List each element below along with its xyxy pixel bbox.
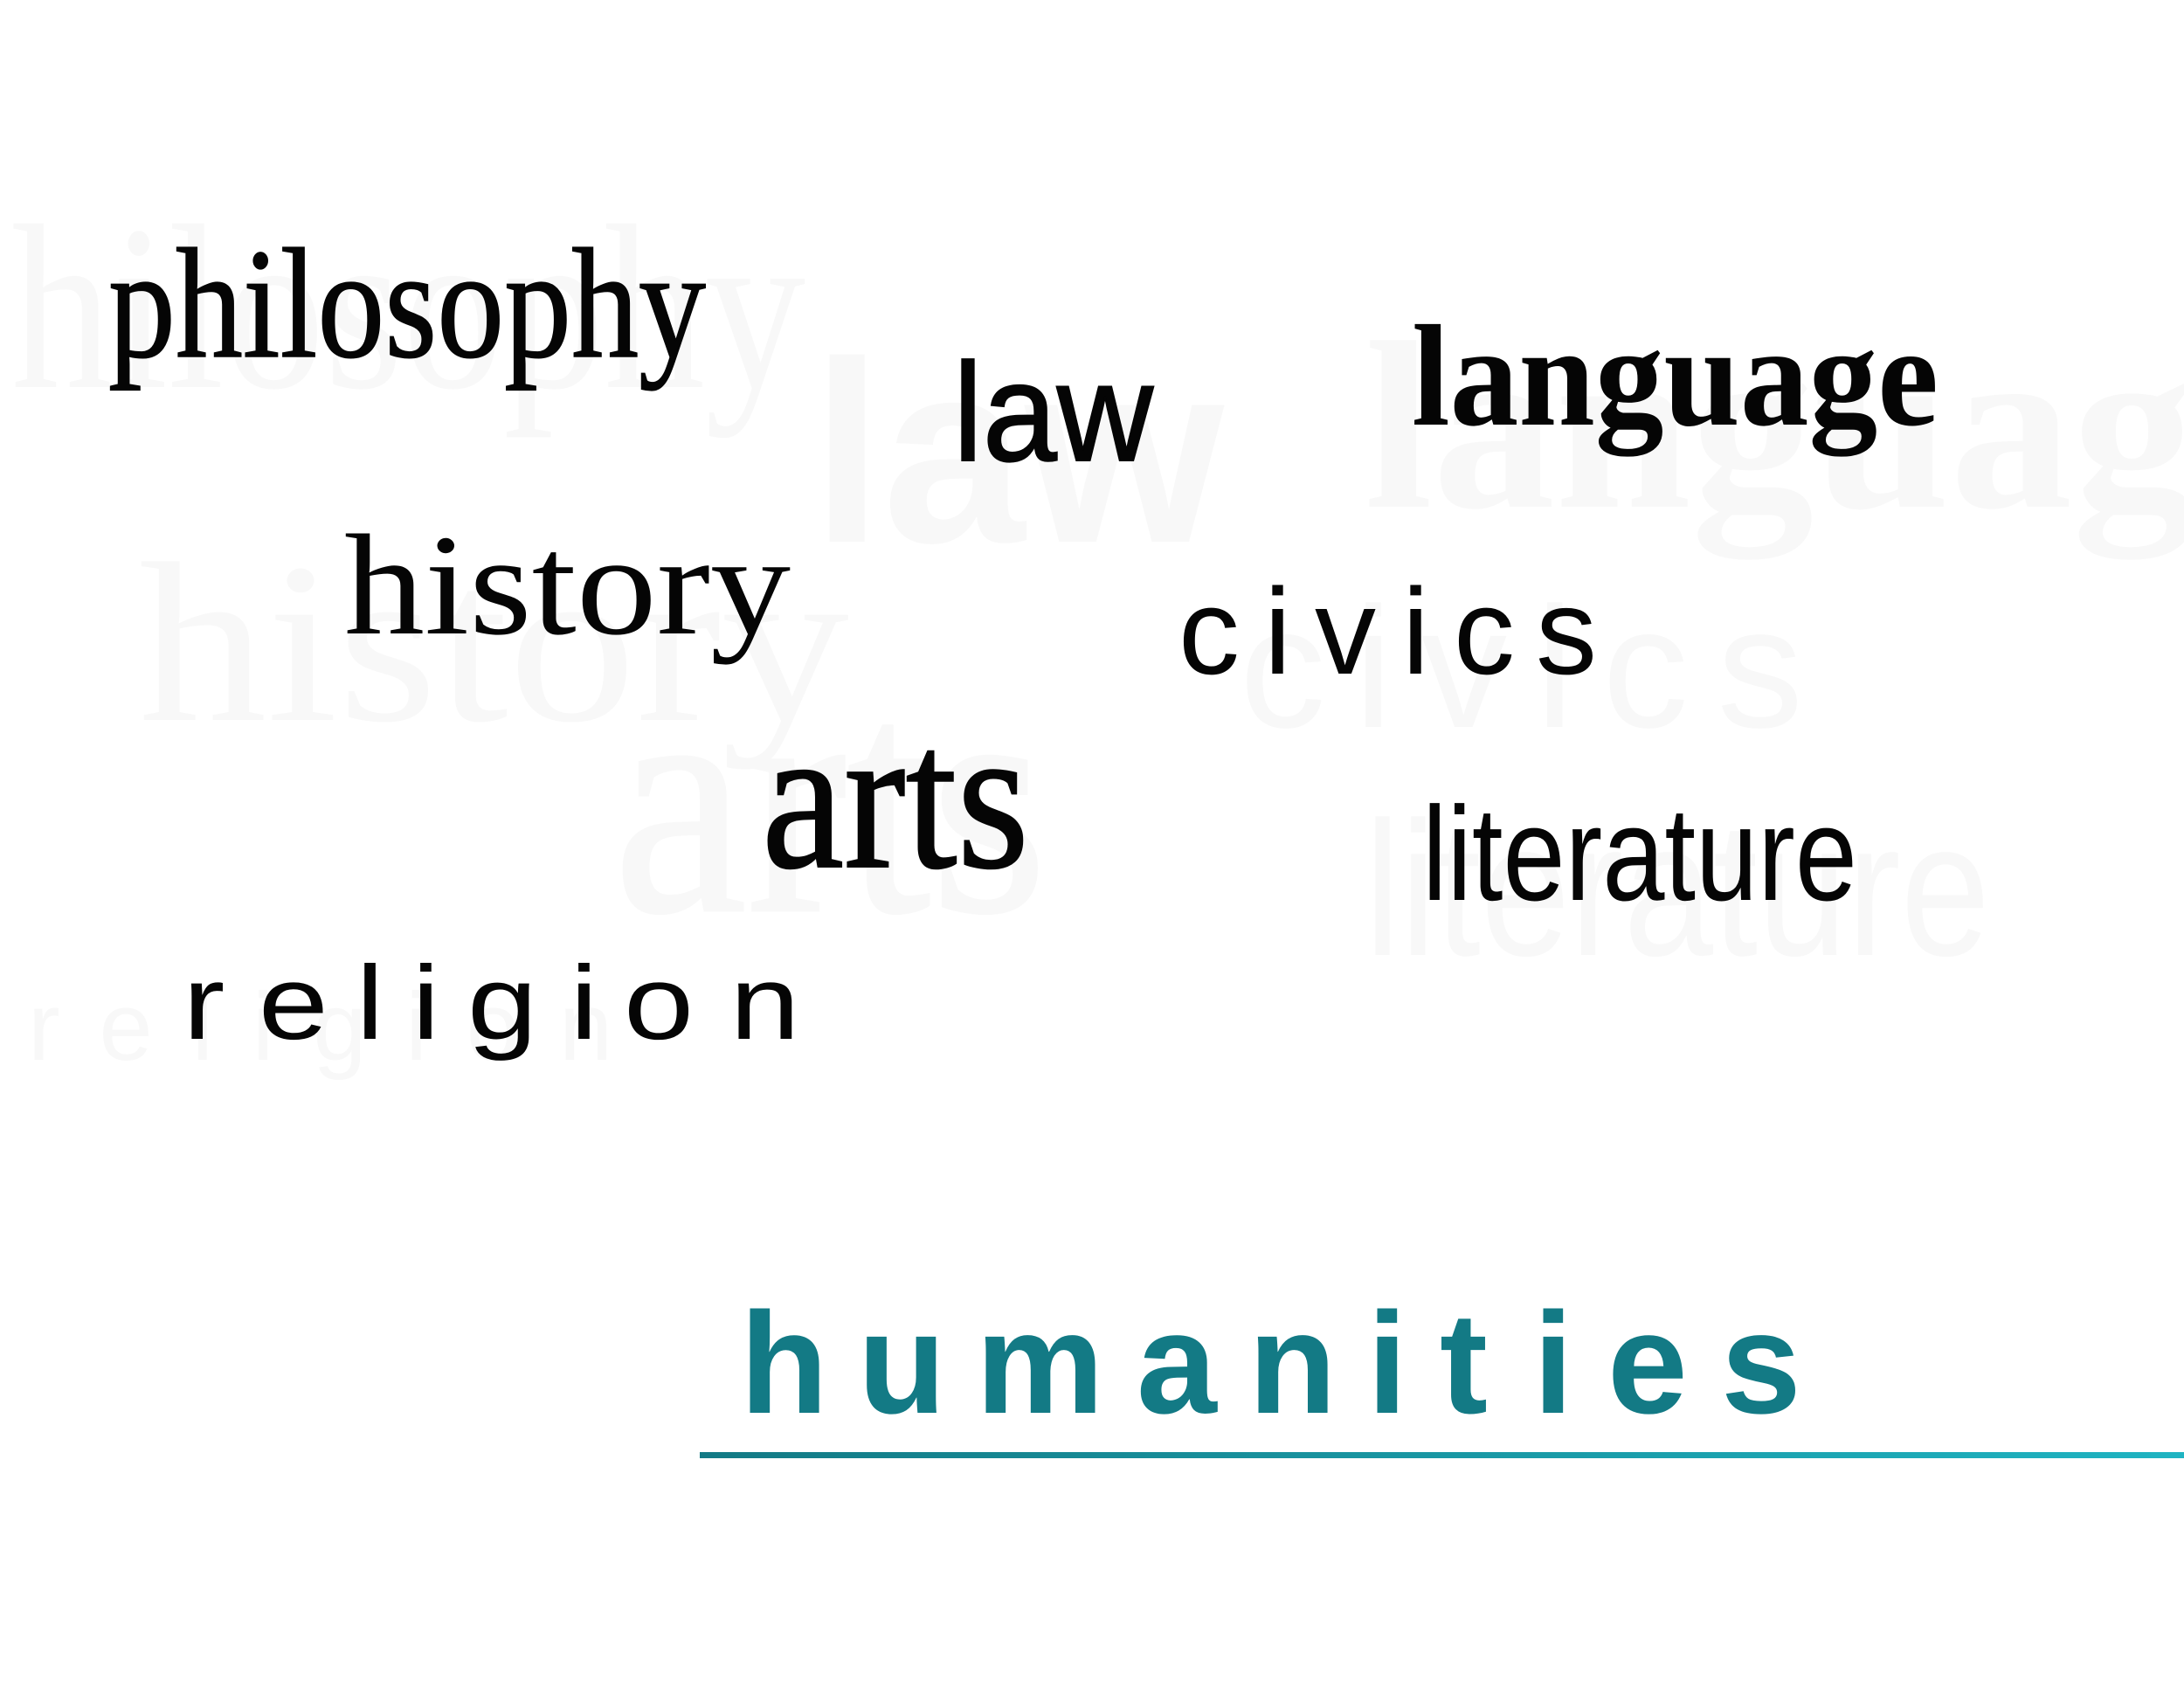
ghost word: arts: arts <box>613 619 1047 982</box>
word: history: history <box>344 505 791 665</box>
word: philosophy: philosophy <box>108 217 706 391</box>
word: arts: arts <box>762 684 1029 911</box>
title: humanities: humanities <box>740 1283 1801 1443</box>
word: law: law <box>953 334 1153 490</box>
ghost word: civics: civics <box>1240 571 1803 764</box>
ghost word: law: law <box>812 308 1225 597</box>
word: civics: civics <box>1178 563 1597 700</box>
word: language: language <box>1412 295 1939 457</box>
word: literature: literature <box>1422 779 1857 929</box>
ghost word: religion: religion <box>28 973 612 1081</box>
title underline <box>700 1452 2184 1458</box>
word: religion: religion <box>183 944 800 1062</box>
ghost word: literature: literature <box>1365 783 1990 996</box>
ghost word: history: history <box>139 516 849 770</box>
